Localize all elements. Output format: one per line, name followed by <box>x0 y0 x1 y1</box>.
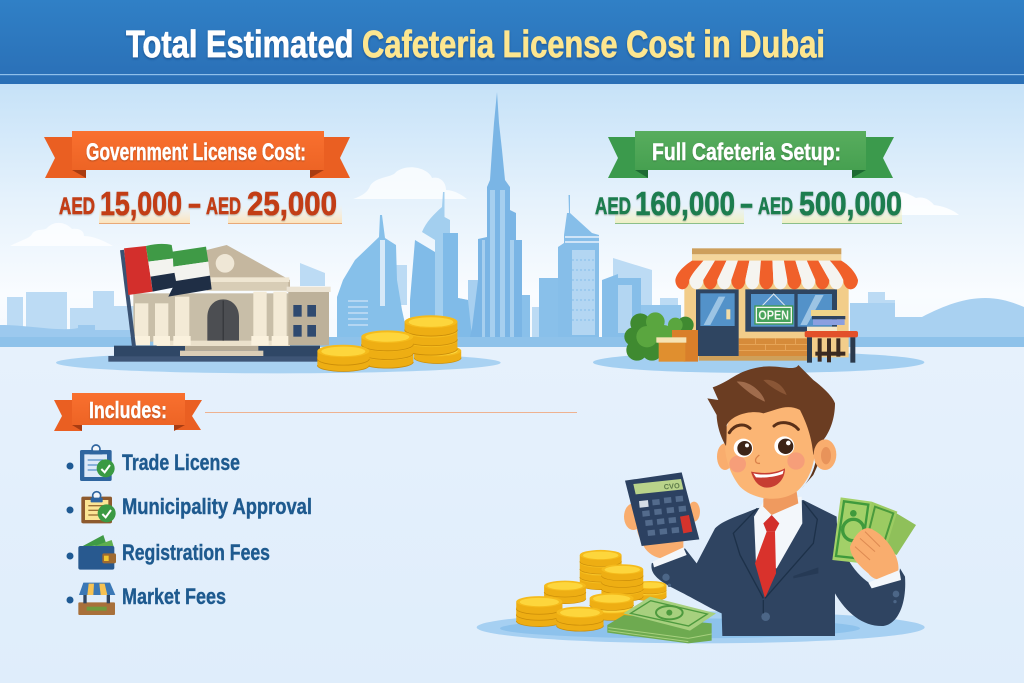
value: government cost range: 15,000 <box>100 185 182 222</box>
scene: businessman with calculator, coins and cash <box>477 365 925 643</box>
Dubai skyline <box>0 92 1024 347</box>
hair <box>707 365 835 455</box>
open sign: OPEN <box>758 309 789 323</box>
mouth <box>751 468 785 488</box>
mid-tone hills and blocks <box>0 325 130 347</box>
value: full setup cost range: AED <box>595 193 631 220</box>
plants and planters <box>624 312 698 362</box>
label: Municipality Approval <box>122 494 312 519</box>
lapels <box>733 502 817 613</box>
item: municipality approval <box>66 492 312 523</box>
label: Trade License <box>122 450 240 475</box>
cloud: right <box>890 192 959 215</box>
tie <box>755 515 779 598</box>
banner: full cafeteria setup <box>608 131 894 178</box>
open sign <box>755 294 793 324</box>
banner: includes <box>54 393 202 431</box>
value: government cost range: 25,000 <box>247 185 337 222</box>
calculator: CVO <box>663 481 680 491</box>
title: Total Estimated Cafeteria License Cost in Dubai <box>126 24 825 66</box>
calculator <box>625 472 699 546</box>
table and books <box>805 310 858 363</box>
curved tower <box>422 192 473 346</box>
value: full setup cost range <box>595 185 902 224</box>
right hand with banknotes <box>832 497 916 588</box>
includes list <box>66 445 312 615</box>
icon: approval document <box>81 492 116 523</box>
divider line <box>205 412 577 413</box>
head <box>717 402 815 499</box>
scene: cafeteria storefront <box>593 248 924 373</box>
banner text: Government License Cost: <box>86 139 306 166</box>
item: market fees <box>66 583 226 615</box>
coin stacks <box>317 315 461 371</box>
icon: clipboard with check <box>80 445 115 481</box>
shop building <box>684 248 849 361</box>
shadow ellipse <box>56 352 501 373</box>
Burj tower <box>468 92 528 346</box>
label: Market Fees <box>122 584 226 609</box>
neck <box>763 492 798 515</box>
item: trade license <box>66 445 240 481</box>
right towers <box>522 295 530 345</box>
value: full setup cost range: AED <box>758 193 793 220</box>
icon: market stall <box>78 583 115 615</box>
header band <box>0 0 1024 84</box>
value: government cost range: AED <box>206 193 241 220</box>
ground <box>0 346 1024 683</box>
shirt <box>754 497 802 568</box>
cloud: centre <box>353 167 467 199</box>
scene: government building with flags and coins <box>56 244 501 373</box>
cloud: left <box>10 223 113 246</box>
label: Registration Fees <box>122 540 270 565</box>
skyline base band <box>0 337 1024 347</box>
far pale buildings <box>7 240 895 347</box>
item: registration fees <box>66 535 270 570</box>
jacket <box>651 500 905 636</box>
value: full setup cost range: 160,000 <box>635 185 735 222</box>
value: government cost range: AED <box>59 193 95 220</box>
value: government cost range <box>59 185 342 224</box>
left hand and cuff <box>624 502 700 567</box>
UAE flags <box>122 244 212 347</box>
tower left of centre <box>337 215 410 346</box>
sky background <box>0 84 1024 347</box>
shadow ellipse <box>593 352 924 373</box>
right ear <box>814 439 836 470</box>
banner text: Full Cafeteria Setup: <box>652 139 841 166</box>
eyes <box>734 436 794 457</box>
banner: government license cost <box>44 131 350 178</box>
coin pile <box>516 550 666 631</box>
banner text: Includes: <box>89 397 167 423</box>
value: full setup cost range: 500,000 <box>799 185 902 222</box>
icon: wallet <box>78 535 116 570</box>
hair behind neck <box>802 450 820 488</box>
desk shadow <box>477 611 925 643</box>
government building <box>108 245 331 362</box>
striped awning <box>675 261 858 289</box>
cash stack <box>607 597 716 643</box>
